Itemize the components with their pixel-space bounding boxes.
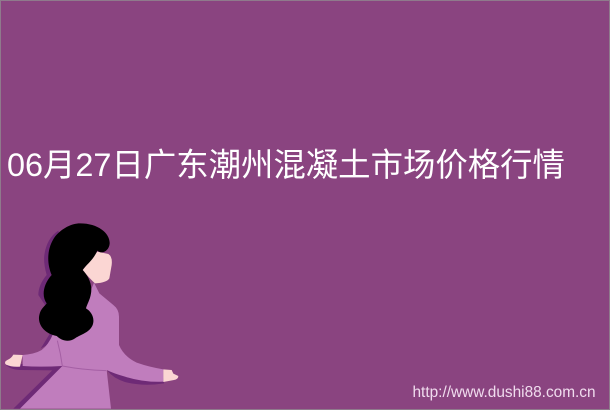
dress — [20, 283, 163, 409]
illustration: woman seen from behind — [5, 223, 178, 409]
watermark url: http://www.dushi88.com.cn — [412, 384, 596, 401]
shadow behind figure — [5, 231, 164, 409]
right hand — [163, 369, 178, 382]
head — [83, 252, 112, 283]
dress seams — [57, 341, 106, 371]
hair — [39, 223, 110, 341]
left hand — [5, 355, 23, 367]
title: 06月27日广东潮州混凝土市场价格行情 — [7, 147, 565, 183]
